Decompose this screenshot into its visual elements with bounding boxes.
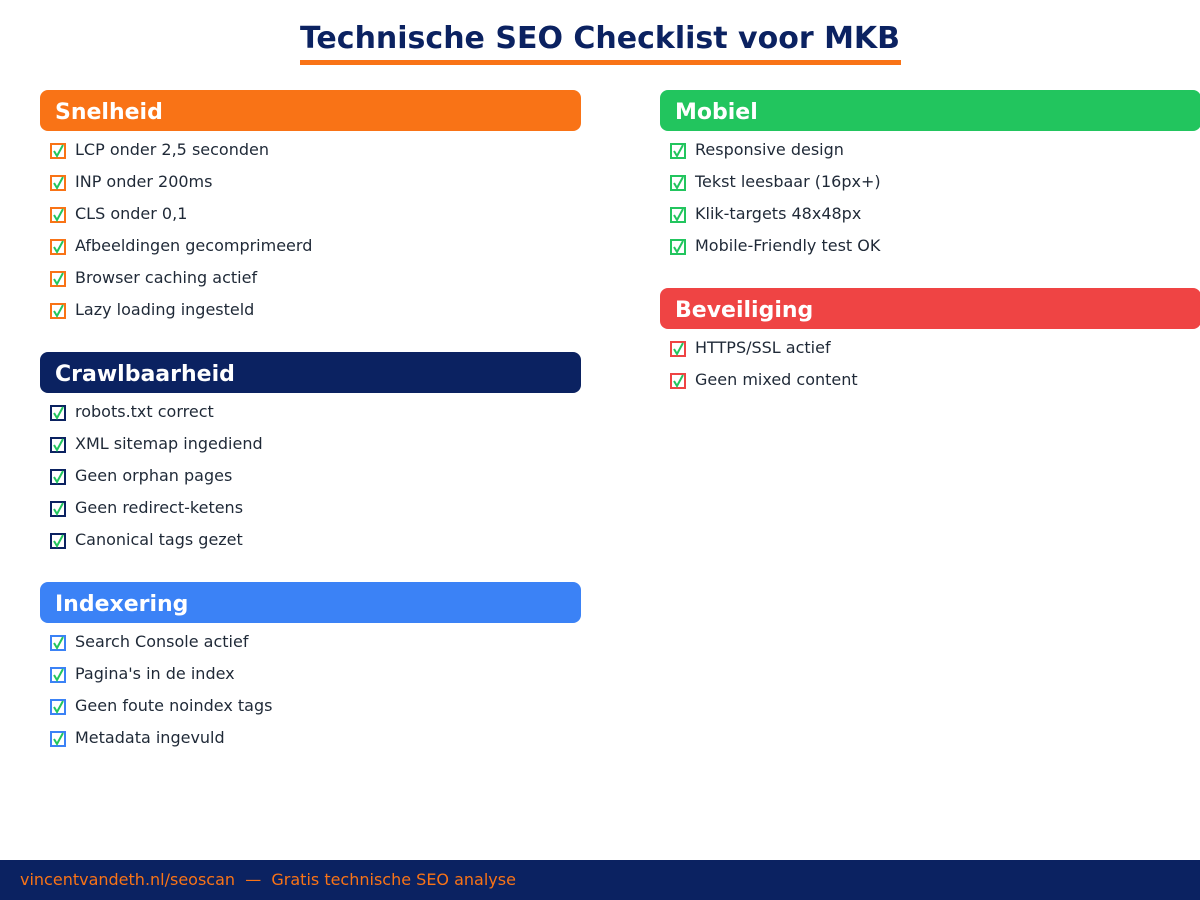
items: Indexering: Search Console actief xyxy=(75,632,249,651)
items: Crawlbaarheid: Geen orphan pages xyxy=(75,466,232,485)
panel: Snelheid xyxy=(40,90,581,319)
items: Mobiel xyxy=(671,140,881,255)
items: Indexering: Metadata ingevuld xyxy=(75,728,225,747)
header: Indexering: Indexering xyxy=(55,592,188,617)
title: Technische SEO Checklist voor MKB xyxy=(300,21,900,56)
items: Mobiel: Responsive design xyxy=(695,140,844,159)
items: Indexering: Pagina's in de index xyxy=(75,664,235,683)
header: Snelheid xyxy=(40,90,581,131)
footer: vincentvandeth.nl/seoscan — Gratis technische SEO analyse xyxy=(20,870,516,889)
panel: Crawlbaarheid xyxy=(40,352,581,549)
items: Snelheid: Lazy loading ingesteld xyxy=(75,300,254,319)
header: Beveiliging: Beveiliging xyxy=(675,298,813,323)
panel: Indexering xyxy=(40,582,581,747)
items: Beveiliging xyxy=(671,338,858,389)
header: Crawlbaarheid: Crawlbaarheid xyxy=(55,362,235,387)
panel: Beveiliging xyxy=(660,288,1200,389)
items: Beveiliging: Geen mixed content xyxy=(695,370,858,389)
header: Mobiel: Mobiel xyxy=(675,100,758,125)
items: Snelheid: CLS onder 0,1 xyxy=(75,204,187,223)
footer xyxy=(0,860,1200,900)
items: Snelheid: Browser caching actief xyxy=(75,268,257,287)
header: Mobiel xyxy=(660,90,1200,131)
items: Crawlbaarheid: XML sitemap ingediend xyxy=(75,434,263,453)
header: Crawlbaarheid xyxy=(40,352,581,393)
items: Mobiel: Tekst leesbaar (16px+) xyxy=(694,172,881,191)
items: Indexering xyxy=(51,632,272,747)
items: Snelheid: Afbeeldingen gecomprimeerd xyxy=(75,236,312,255)
panel: Mobiel xyxy=(660,90,1200,255)
items: Crawlbaarheid: Canonical tags gezet xyxy=(75,530,243,549)
items: Snelheid: LCP onder 2,5 seconden xyxy=(75,140,269,159)
header: Snelheid: Snelheid xyxy=(55,100,163,125)
items: Snelheid xyxy=(51,140,312,319)
items: Crawlbaarheid xyxy=(51,402,263,549)
items: Beveiliging: HTTPS/SSL actief xyxy=(695,338,831,357)
header: Beveiliging xyxy=(660,288,1200,329)
items: Snelheid: INP onder 200ms xyxy=(75,172,212,191)
items: Mobiel: Klik-targets 48x48px xyxy=(695,204,861,223)
items: Mobiel: Mobile-Friendly test OK xyxy=(695,236,881,255)
items: Indexering: Geen foute noindex tags xyxy=(75,696,272,715)
items: Crawlbaarheid: Geen redirect-ketens xyxy=(75,498,243,517)
header: Indexering xyxy=(40,582,581,623)
items: Crawlbaarheid: robots.txt correct xyxy=(75,402,214,421)
